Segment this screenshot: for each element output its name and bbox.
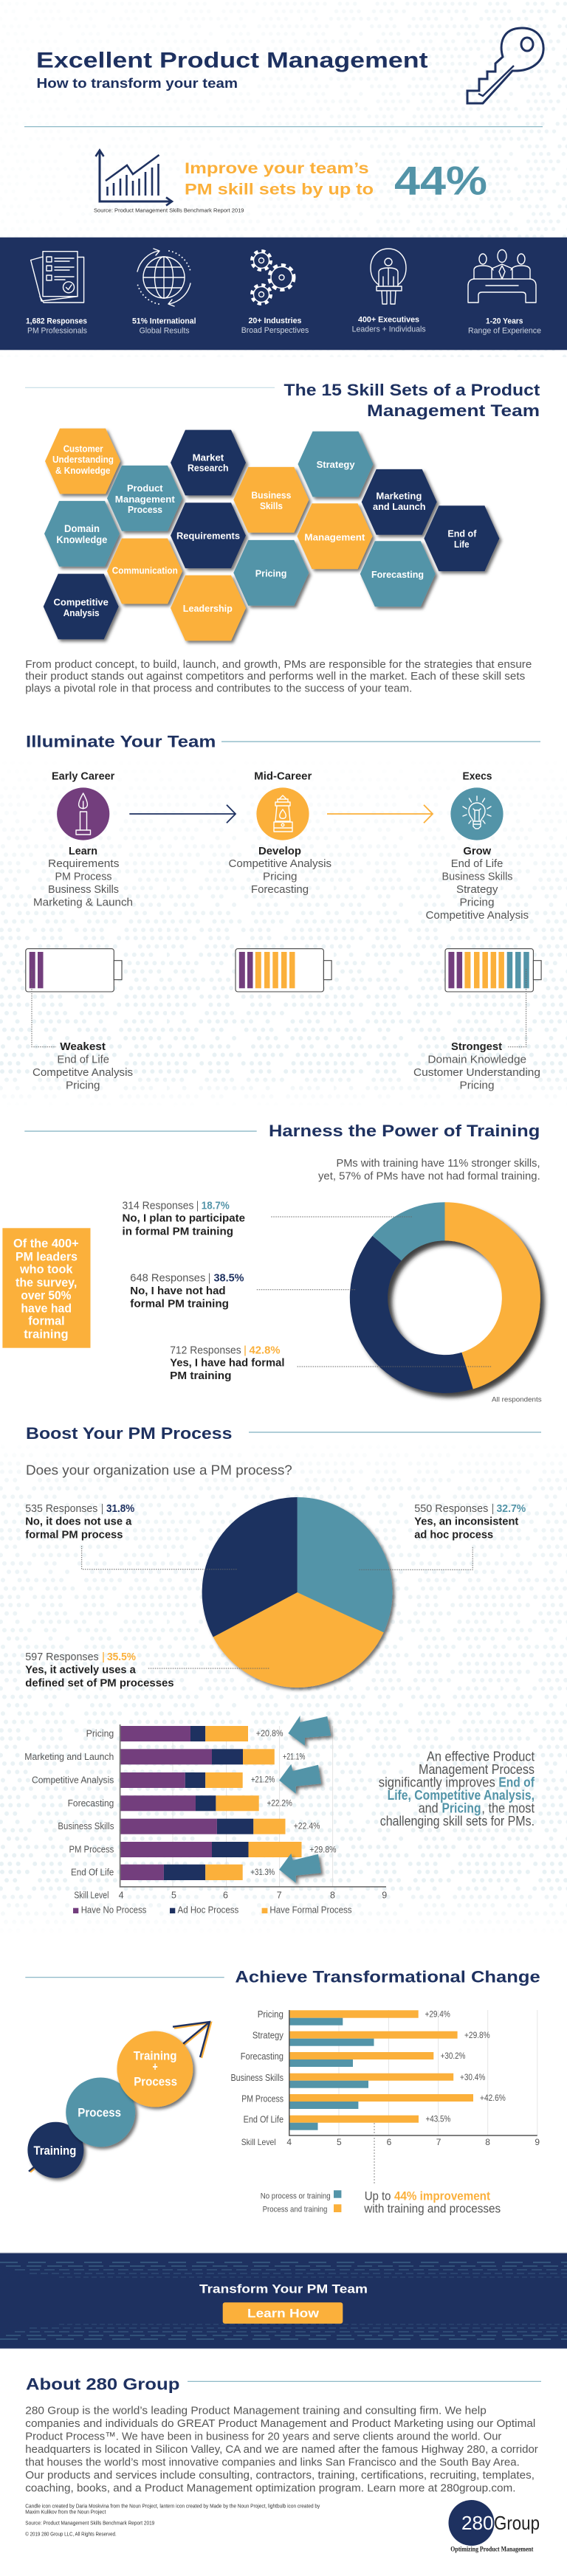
text block: 44 percent improvement: Up to xyxy=(365,2189,391,2203)
arrow: pricing highlight xyxy=(288,1716,331,1746)
hexagon: pricing: Pricing xyxy=(255,568,286,579)
text block: about: 280 Group is the world’s leading Product Management training and consulting firm. We help xyxy=(25,2405,487,2417)
subtitle: How to transform your team xyxy=(37,76,238,91)
icon: checklist documents xyxy=(31,252,84,303)
column: mid career xyxy=(229,771,331,896)
column: execs: Competitive Analysis xyxy=(425,909,529,922)
row labels: Business Skills xyxy=(230,2073,284,2083)
label: had formal training: PM training xyxy=(170,1370,232,1382)
text block: skill sets intro: their product stands out against competitors and performs well in the market. Each of these skill sets xyxy=(25,670,525,683)
bars: have no process xyxy=(120,1726,217,1880)
hexagon: business skills xyxy=(233,467,309,533)
text block: about xyxy=(25,2405,538,2495)
callout: PM leaders training: have had xyxy=(21,1302,72,1315)
axis labels: 9 xyxy=(382,1890,387,1900)
text block: credits and source: Source: Product Management Skills Benchmark Report 2019 xyxy=(25,2521,154,2526)
hexagon: end of life: End of xyxy=(447,528,477,539)
column: early career: Marketing & Launch xyxy=(33,897,133,909)
axis labels: 5 xyxy=(337,2137,342,2147)
row labels: End Of Life xyxy=(244,2115,284,2125)
label: had formal training: | xyxy=(244,1344,247,1356)
axis labels: 7 xyxy=(277,1890,282,1900)
column: early career: Business Skills xyxy=(48,883,119,896)
text block: about: headquarters is located in Silicon Valley, CA and we are named after the famous Highway 280, a corridor xyxy=(25,2443,538,2456)
cta heading: Transform Your PM Team xyxy=(199,2282,368,2296)
value labels: +21.1% xyxy=(283,1752,306,1762)
hexagon: end of life xyxy=(424,505,499,571)
panel: call to action band xyxy=(0,2253,567,2349)
text block: effective process: End of xyxy=(498,1775,535,1790)
hexagon: forecasting: Forecasting xyxy=(371,569,424,580)
header: title block xyxy=(36,49,428,91)
label: defined process: Yes, it actively uses a xyxy=(25,1664,136,1677)
label: no formal process: No, it does not use a xyxy=(25,1516,132,1528)
legend: training and process: No process or training xyxy=(261,2192,331,2200)
callout: PM leaders training xyxy=(2,1228,90,1348)
hexagon: competitive analysis: Analysis xyxy=(63,607,100,618)
row labels: Forecasting xyxy=(241,2051,284,2062)
value labels xyxy=(425,2010,506,2124)
hexagon: requirements xyxy=(171,503,246,568)
arrow: end of life highlight xyxy=(279,1854,321,1883)
label: no formal training xyxy=(130,1272,244,1311)
icon: candle xyxy=(57,787,109,840)
hexagon: communication xyxy=(107,539,182,604)
text block: 44 percent improvement: 44% improvement xyxy=(394,2189,490,2203)
hexagon: customer understanding: Understanding xyxy=(52,455,114,465)
stat: international xyxy=(132,249,196,335)
icon: speaker in bulb xyxy=(371,249,406,304)
column: early career: Early Career xyxy=(52,771,115,783)
label: ad hoc process: 32.7% xyxy=(496,1502,526,1515)
heading: 15 skill sets xyxy=(284,381,540,420)
bars: process and training xyxy=(289,2010,473,2123)
row labels: Competitive Analysis xyxy=(32,1774,114,1785)
axis labels: 8 xyxy=(485,2137,490,2147)
hexagon: marketing and launch: and Launch xyxy=(373,501,426,512)
icon: rising bar chart xyxy=(96,151,172,205)
circle: training + process: + xyxy=(152,2060,158,2074)
text block: training intro xyxy=(318,1157,540,1183)
heading: about 280 group: About 280 Group xyxy=(26,2375,179,2393)
text block: credits and source xyxy=(25,2504,320,2538)
circle: training: Training xyxy=(34,2144,76,2158)
text block: effective process: challenging skill sets for PMs. xyxy=(380,1814,535,1829)
stat: industries: 20+ Industries xyxy=(248,317,301,325)
callout: improve skill sets by 44 percent xyxy=(94,151,487,214)
column: execs: Grow xyxy=(463,845,491,857)
text block: weakest skills: Weakest xyxy=(60,1040,106,1053)
label: no formal training: formal PM training xyxy=(130,1298,229,1311)
hexagon: market research: Market xyxy=(193,452,224,463)
value labels xyxy=(250,1728,337,1877)
text block: effective process: significantly improves xyxy=(379,1775,495,1790)
column: mid career: Mid-Career xyxy=(254,771,312,783)
label: had formal training: Yes, I have had formal xyxy=(170,1357,285,1370)
value labels: +20.8% xyxy=(256,1728,284,1738)
value labels: +22.2% xyxy=(267,1798,292,1808)
stat: years of experience: 1-20 Years xyxy=(486,317,523,326)
hexagon: marketing and launch xyxy=(362,469,437,535)
title: Excellent Product Management xyxy=(36,49,428,73)
hexagon: end of life: Life xyxy=(454,539,470,550)
stat: years of experience: Range of Experience xyxy=(468,326,541,335)
label: defined process: defined set of PM processes xyxy=(25,1677,174,1689)
hexagon: customer understanding xyxy=(45,429,120,494)
row labels: Strategy xyxy=(252,2031,284,2041)
callout: PM leaders training: training xyxy=(24,1327,69,1341)
stat: industries xyxy=(241,251,309,335)
text block: effective process xyxy=(379,1750,535,1829)
column: early career: Requirements xyxy=(48,857,120,870)
column: execs xyxy=(425,771,529,922)
text block: about: coaching, books, and a Product Management optimization program. Learn more at 280group.com. xyxy=(25,2482,516,2495)
stat: international: 51% International xyxy=(132,317,196,326)
hexagon: product management process: Management xyxy=(115,494,175,505)
legend: process types: Have Formal Process xyxy=(269,1904,352,1915)
text block: effective process: An effective Product xyxy=(427,1750,535,1764)
cta button: Learn How xyxy=(247,2307,320,2321)
row labels xyxy=(24,1727,114,1878)
axis labels: 6 xyxy=(387,2137,392,2147)
note: all respondents: All respondents xyxy=(492,1395,542,1403)
label: ad hoc process: Yes, an inconsistent xyxy=(414,1516,518,1528)
row labels: End Of Life xyxy=(71,1867,114,1878)
stat: responses: PM Professionals xyxy=(27,326,87,335)
hexagon: leadership: Leadership xyxy=(183,603,233,614)
stat: executives xyxy=(352,249,426,334)
stat: responses xyxy=(26,252,87,335)
hexagon: market research xyxy=(171,430,246,495)
label: had formal training: 42.8% xyxy=(250,1344,281,1356)
label: plan to participate: 18.7% xyxy=(202,1199,230,1212)
text block: effective process: , the most xyxy=(481,1801,535,1816)
arrow: growth xyxy=(29,2022,211,2172)
value labels: +31.3% xyxy=(250,1867,275,1877)
value labels: +30.4% xyxy=(460,2073,485,2082)
bars: no process or training xyxy=(289,2018,374,2130)
column: execs: Business Skills xyxy=(441,871,512,883)
heading: harness the power of training: Harness the Power of Training xyxy=(269,1122,540,1140)
legend: training and process: Process and training xyxy=(263,2205,327,2214)
stat: executives: Leaders + Individuals xyxy=(352,325,426,334)
hexagon: customer understanding: Customer xyxy=(63,443,103,454)
stat: industries: Broad Perspectives xyxy=(241,326,309,335)
hexagon: domain knowledge xyxy=(44,501,120,567)
column: execs: Strategy xyxy=(456,883,498,896)
callout: PM leaders training: Of the 400+ xyxy=(13,1237,79,1251)
arrow: mid career to execs xyxy=(327,805,433,823)
hexagon grid: 15 skill sets xyxy=(44,429,499,640)
circle: training + process xyxy=(117,2031,193,2107)
heading: achieve transformational change: Achieve Transformational Change xyxy=(235,1968,540,1986)
hexagon: customer understanding: & Knowledge xyxy=(55,466,110,476)
column: early career xyxy=(33,771,133,909)
hexagon: strategy xyxy=(298,432,374,497)
column: mid career: Competitive Analysis xyxy=(229,857,331,870)
circle: process xyxy=(66,2078,135,2147)
value labels: +22.4% xyxy=(294,1821,320,1831)
circle: training xyxy=(27,2122,83,2178)
axis labels: 7 xyxy=(436,2137,441,2147)
label: plan to participate: in formal PM training xyxy=(123,1225,233,1237)
text block: strongest skills: Customer Understanding xyxy=(413,1066,540,1079)
hexagon: requirements: Requirements xyxy=(176,531,240,542)
row labels: Forecasting xyxy=(68,1798,114,1809)
axis labels: 4 xyxy=(286,2137,292,2147)
callout text: Improve your team’s xyxy=(185,159,369,177)
stat: executives: 400+ Executives xyxy=(358,316,419,325)
label: no formal process: 535 Responses xyxy=(25,1502,97,1515)
value labels: +30.2% xyxy=(441,2052,465,2061)
text block: about: companies and individuals do GREAT Product Management and Product Marketing using our Optimal xyxy=(25,2417,535,2430)
hexagon: strategy: Strategy xyxy=(317,460,355,470)
arrow: early to mid career xyxy=(129,805,236,823)
stat: responses: 1,682 Responses xyxy=(26,317,87,326)
bars: have formal process xyxy=(205,1726,301,1880)
diagram: training plus process growth xyxy=(27,2022,211,2178)
axis labels: 6 xyxy=(223,1890,228,1900)
hexagon: communication: Communication xyxy=(112,565,178,576)
logo: 280 Group: Group xyxy=(494,2512,540,2534)
text block: weakest skills: Competitve Analysis xyxy=(32,1066,133,1079)
label: defined process xyxy=(25,1651,174,1689)
column: early career: Learn xyxy=(69,845,97,857)
label: had formal training xyxy=(170,1344,285,1382)
text block: 44 percent improvement: with training and processes xyxy=(363,2202,501,2216)
text block: strongest skills: Pricing xyxy=(459,1080,495,1092)
legend: process types: Ad Hoc Process xyxy=(177,1904,239,1915)
text block: weakest skills xyxy=(32,1040,133,1092)
label: defined process: 597 Responses xyxy=(25,1651,99,1663)
circle: process: Process xyxy=(78,2106,121,2120)
row labels: Business Skills xyxy=(58,1820,114,1831)
hexagon: leadership xyxy=(171,576,246,640)
callout: PM leaders training: formal xyxy=(28,1315,65,1328)
battery: strongest level xyxy=(445,949,541,992)
label: defined process: 35.5% xyxy=(107,1651,136,1663)
callout: PM leaders training: the survey, xyxy=(16,1276,77,1289)
axis labels xyxy=(74,1890,387,1900)
label: ad hoc process: 550 Responses xyxy=(414,1502,488,1515)
label: ad hoc process: | xyxy=(492,1502,494,1515)
logo: 280 Group xyxy=(449,2500,540,2552)
label: no formal process: | xyxy=(101,1502,103,1515)
axis labels: 9 xyxy=(535,2137,540,2147)
hexagon: management: Management xyxy=(304,531,365,542)
text block: skill sets intro xyxy=(25,658,532,695)
hexagon: business skills: Business xyxy=(251,489,291,500)
axis labels: Skill Level xyxy=(74,1890,109,1900)
label: no formal process: formal PM process xyxy=(25,1528,123,1541)
label: had formal training: 712 Responses xyxy=(170,1344,241,1356)
label: no formal training: No, I have not had xyxy=(130,1285,226,1297)
column: mid career: Forecasting xyxy=(251,883,309,896)
hexagon: pricing xyxy=(233,540,309,606)
label: no formal process: 31.8% xyxy=(106,1502,134,1515)
hexagon: product management process: Product xyxy=(127,483,163,494)
callout: improve skill sets by 44 percent: PM skill sets by up to xyxy=(185,180,374,198)
hexagon: product management process xyxy=(107,466,182,531)
chart: skill level by process xyxy=(24,1724,387,1900)
label: defined process: | xyxy=(102,1651,105,1663)
text block: credits and source: Candle icon created by Daria Moskvina from the Noun Project, lantern icon created by Made by the Noun Project, lightbulb icon created by xyxy=(25,2504,320,2509)
text block: credits and source: Maxim Kulikov from the Noun Project xyxy=(25,2510,106,2515)
hexagon: business skills: Skills xyxy=(260,500,283,511)
label: ad hoc process xyxy=(414,1502,526,1541)
text block: weakest skills: End of Life xyxy=(57,1054,109,1066)
text block: skill sets intro: From product concept, to build, launch, and growth, PMs are responsible for the strategies that ensure xyxy=(25,658,532,671)
stat: international: Global Results xyxy=(140,326,190,335)
row labels xyxy=(230,2009,284,2125)
chart: training donut xyxy=(350,1202,540,1393)
text block: skill sets intro: plays a pivotal role in that process and contributes to the success of your team. xyxy=(25,683,412,695)
text block: credits and source: © 2019 280 Group LLC, All Rights Reserved. xyxy=(25,2532,117,2538)
text block: training intro: yet, 57% of PMs have not had formal training. xyxy=(318,1170,540,1183)
value labels: +42.6% xyxy=(480,2094,506,2103)
arrow: competitive analysis highlight xyxy=(279,1764,321,1794)
hexagon: management xyxy=(297,503,372,569)
logo: 280 Group: 280 xyxy=(461,2512,494,2534)
axis labels: 4 xyxy=(119,1890,124,1900)
label: no formal training: 38.5% xyxy=(214,1272,244,1285)
heading: illuminate your team: Illuminate Your Team xyxy=(26,732,216,750)
column: execs: Pricing xyxy=(459,897,495,909)
label: no formal process xyxy=(25,1502,134,1541)
hexagon: product management process: Process xyxy=(128,504,162,515)
icon: lantern xyxy=(256,787,309,840)
hexagon: market research: Research xyxy=(188,463,229,474)
axis labels xyxy=(241,2137,540,2147)
row labels: PM Process xyxy=(69,1844,114,1855)
text block: effective process: Life, Competitive Analysis, xyxy=(388,1788,535,1803)
label: no formal training: 648 Responses xyxy=(130,1272,205,1285)
icon: team at table xyxy=(468,249,536,303)
hexagon: forecasting xyxy=(360,541,436,607)
legend: training and process xyxy=(261,2190,341,2214)
source note: Source: Product Management Skills Benchmark Report 2019 xyxy=(94,207,244,214)
legend: process types: Have No Process xyxy=(81,1904,147,1915)
text block: about: that houses the world’s most innovative companies and links San Francisco and the South Bay Area. xyxy=(25,2456,520,2469)
column: early career: PM Process xyxy=(55,871,112,883)
text block: effective process: and xyxy=(419,1801,439,1816)
hexagon: competitive analysis: Competitive xyxy=(53,597,109,608)
axis labels: 5 xyxy=(171,1890,176,1900)
hexagon: competitive analysis xyxy=(44,574,119,639)
column: execs: Execs xyxy=(462,771,492,783)
axis labels: Skill Level xyxy=(241,2137,276,2147)
column: mid career: Develop xyxy=(258,845,301,857)
icon: key xyxy=(467,28,543,103)
label: plan to participate xyxy=(123,1199,245,1237)
heading: 15 skill sets: The 15 Skill Sets of a Product xyxy=(284,381,540,399)
hexagon: marketing and launch: Marketing xyxy=(376,491,422,502)
battery: mid level xyxy=(236,949,331,992)
legend: process types xyxy=(73,1904,352,1915)
callout: PM leaders training: over 50% xyxy=(21,1289,72,1302)
text block: about: Product Process™. We have been in business for 20 years and serve clients around the world. Our xyxy=(25,2431,501,2443)
circle: training + process: Training xyxy=(134,2049,177,2063)
column: execs: End of Life xyxy=(451,857,503,870)
question text: Does your organization use a PM process? xyxy=(26,1463,292,1477)
value labels: +29.4% xyxy=(425,2010,450,2019)
big number 44%: 44% xyxy=(394,157,487,203)
heading: 15 skill sets: Management Team xyxy=(367,401,540,420)
label: plan to participate: | xyxy=(196,1199,199,1212)
value labels: +43.5% xyxy=(425,2115,450,2124)
chart: skill level with training and process xyxy=(230,2009,540,2147)
callout: PM leaders training: PM leaders xyxy=(16,1250,78,1263)
battery: weakest level xyxy=(26,949,122,992)
row labels: Pricing xyxy=(258,2009,284,2020)
icon: three gears xyxy=(252,251,294,304)
text block: 44 percent improvement xyxy=(363,2189,501,2216)
hexagon: domain knowledge: Domain xyxy=(64,523,100,534)
column: mid career: Pricing xyxy=(263,871,297,883)
logo: 280 Group: Optimizing Product Management xyxy=(450,2545,533,2552)
text block: training intro: PMs with training have 11% stronger skills, xyxy=(337,1157,540,1170)
label: ad hoc process: ad hoc process xyxy=(414,1528,493,1541)
value labels: +29.8% xyxy=(464,2031,490,2040)
row labels: Pricing xyxy=(86,1727,114,1738)
row labels: Marketing and Launch xyxy=(24,1751,114,1762)
callout: PM leaders training: who took xyxy=(19,1263,73,1277)
text block: weakest skills: Pricing xyxy=(66,1080,100,1092)
circle: training + process: Process xyxy=(134,2075,177,2089)
panel: survey statistics band xyxy=(0,238,567,350)
chart: PM process pie xyxy=(202,1497,393,1688)
bars: ad hoc process xyxy=(164,1726,253,1880)
hexagon: domain knowledge: Knowledge xyxy=(56,534,108,545)
heading: boost your PM process: Boost Your PM Process xyxy=(26,1424,232,1443)
text block: about: Our products and services include consulting, contractors, training, certifications, recruiting, templates, xyxy=(25,2469,535,2482)
icon: light bulb xyxy=(450,787,504,840)
text block: effective process: Management Process xyxy=(419,1762,535,1777)
text block: effective process: Pricing xyxy=(441,1801,481,1816)
row labels: PM Process xyxy=(241,2093,284,2104)
label: no formal training: | xyxy=(208,1272,210,1285)
stat: years of experience xyxy=(468,249,541,335)
value labels: +29.8% xyxy=(309,1844,337,1854)
text block: strongest skills: Domain Knowledge xyxy=(427,1054,526,1066)
text block: strongest skills xyxy=(413,1040,540,1092)
value labels: +21.2% xyxy=(251,1775,275,1785)
text block: strongest skills: Strongest xyxy=(451,1040,502,1053)
axis labels: 8 xyxy=(330,1890,335,1900)
label: plan to participate: No, I plan to participate xyxy=(123,1212,245,1225)
cta button xyxy=(223,2302,343,2324)
icon: globe with arrows xyxy=(137,249,190,306)
label: plan to participate: 314 Responses xyxy=(123,1199,193,1212)
